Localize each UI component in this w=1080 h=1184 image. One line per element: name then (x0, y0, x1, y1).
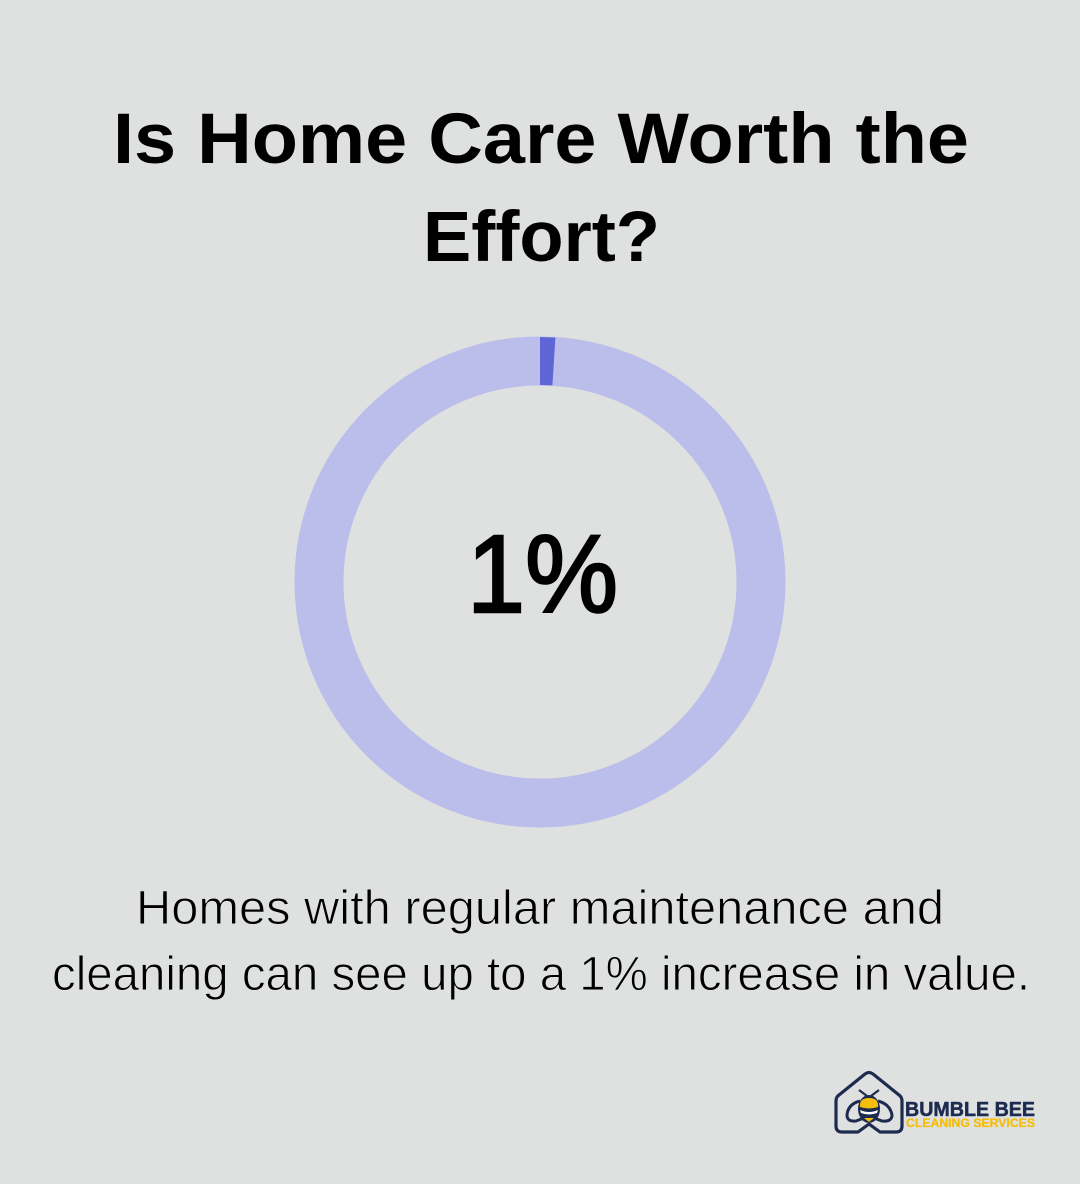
donut value segment (540, 337, 555, 385)
logo tagline: CLEANING SERVICES (906, 1116, 1035, 1130)
description text: Homes with regular maintenance and (136, 882, 944, 935)
title: Is Home Care Worth the (113, 100, 969, 179)
logo name: BUMBLE BEE (905, 1099, 1035, 1121)
donut value: 1% (467, 513, 618, 636)
title: Effort? (423, 198, 660, 277)
donut chart (319, 337, 761, 803)
title (113, 100, 969, 277)
description text (52, 882, 1030, 1001)
description text: cleaning can see up to a 1% increase in value. (52, 948, 1030, 1001)
logo: Bumble Bee Cleaning Services (836, 1072, 1035, 1132)
icon: house with bee (836, 1072, 902, 1132)
